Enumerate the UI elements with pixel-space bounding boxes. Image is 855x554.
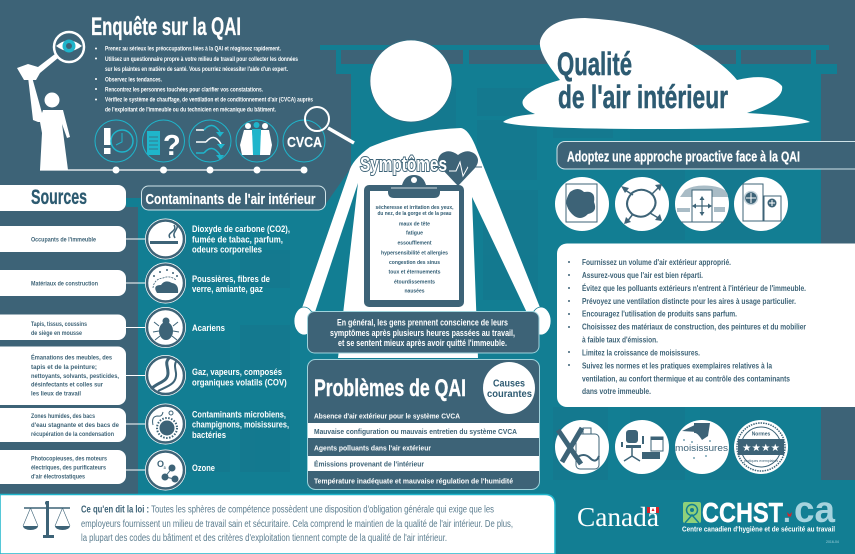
symptoms note: symptômes après plusieurs heures passées au travail,: [330, 328, 515, 338]
source: carpets: Tapis, tissus, coussins: [31, 321, 87, 328]
panel: approche proactive: [555, 142, 855, 474]
causes list: Température inadéquate et mauvaise régulation de l'humidité: [314, 477, 513, 486]
heading: enquête: Enquête sur la QAI: [91, 13, 241, 41]
source: photocopiers: d'air électrostatiques: [31, 474, 85, 480]
icon: ozone: O: [157, 459, 164, 469]
symptoms list: hypersensibilité et allergies: [381, 250, 448, 256]
panel: sources: [0, 185, 141, 484]
source: photocopiers: électriques, des purificateurs: [31, 464, 106, 472]
symptoms list: sécheresse et irritation des yeux,: [376, 205, 454, 211]
recommendations list: Suivez les normes et les pratiques exemplaires relatives à la: [582, 360, 772, 370]
contaminants labels: Ozone: [192, 463, 215, 474]
source: emanations: tapis et de la peinture;: [31, 364, 97, 371]
symptoms list: [376, 205, 454, 295]
icon: mite: [145, 307, 186, 348]
source: humid zones: récupération de la condensation: [31, 431, 114, 438]
contaminants labels: organiques volatils (COV): [192, 377, 287, 388]
heading: contaminants: Contaminants de l'air intérieur: [146, 191, 316, 208]
symptoms title: [360, 151, 482, 186]
investigation bullet list: de l'exploitant de l'immeuble ou du technicien en mécanique du bâtiment.: [105, 106, 276, 113]
logo: CCHST.ca: Centre canadien d'hygiène et de sécurité au travail: [682, 526, 835, 534]
source: emanations: Émanations des meubles, des: [31, 353, 112, 362]
figure with symptoms clipboard: [294, 40, 551, 358]
source: occupants: Occupants de l'immeuble: [31, 236, 96, 244]
source: emanations: [0, 346, 126, 405]
investigation bullet list: Rencontrez les personnes touchées pour clarifier vos constatations.: [105, 86, 263, 93]
icon: ventilation fans: [734, 177, 788, 231]
icon: moisissures: moisissures: [675, 443, 729, 453]
icon: small magnifying glass: [305, 107, 354, 143]
icon: normes: ★★★★: [742, 443, 780, 454]
icon: scales of justice: [23, 501, 70, 538]
symptoms list: nausées: [404, 289, 424, 295]
symptoms list: maux de tête: [399, 221, 430, 227]
source: emanations: désinfectants et colles sur: [31, 382, 103, 389]
icon: CVCA label: CVCA: [287, 134, 322, 151]
source: photocopiers: [0, 450, 126, 484]
icon: normes: pratiques exemplaires: [744, 459, 778, 463]
contaminants labels: Dioxyde de carbone (CO2),: [192, 224, 290, 235]
causes list: Absence d'air extérieur pour le système CVCA: [314, 412, 460, 421]
symptoms note: En général, les gens prennent conscience de leurs: [337, 317, 508, 327]
causes list: Émissions provenant de l'intérieur: [314, 460, 424, 469]
investigation bullet list: sur les plaintes en matière de santé. Vous pourriez nécessiter l'aide d'un expert.: [105, 66, 288, 73]
source: carpets: [0, 314, 126, 340]
symptoms list: toux et éternuements: [388, 269, 440, 275]
source: humid zones: Zones humides, des bacs: [31, 413, 95, 420]
icon: normes: Normes: [752, 432, 771, 438]
source: humid zones: [0, 408, 126, 442]
contaminants labels: verre, amiante, gaz: [192, 284, 263, 295]
panel: contaminants: [126, 186, 326, 490]
law text: Ce qu'en dit la loi : Toutes les sphères de compétence possèdent une disposition d'obligation générale qui exige que les: [81, 504, 494, 516]
source: materials: [0, 270, 126, 296]
title cloud: [503, 18, 810, 129]
recommendations list: ventilation, au confort thermique et au contrôle des contaminants: [582, 373, 790, 383]
icon: cigarette: [145, 218, 186, 260]
icon: air volume: [555, 177, 609, 231]
recommendations list: à faible taux d'émission.: [582, 334, 658, 344]
symptoms title: Symptômes: [360, 154, 447, 176]
icon: dust: [145, 262, 186, 304]
icon: ozone: 3: [164, 465, 166, 470]
contaminants labels: Contaminants microbiens,: [192, 410, 286, 421]
source: carpets: de siège en mousse: [31, 330, 82, 337]
causes list: Mauvaise configuration ou mauvais entretien du système CVCA: [314, 427, 517, 436]
contaminants labels: Poussières, fibres de: [192, 274, 270, 285]
icon: microbes: [145, 404, 186, 444]
law text: employeurs fournissent un milieu de travail sain et sécuritaire. Cela comprend le maintien de la qualité de l'air intérieur. De plus,: [81, 519, 513, 530]
heading: approche proactive: [557, 142, 855, 169]
recommendations list: Limitez la croissance de moisissures.: [582, 347, 700, 357]
panel: ce qu'en dit la loi: [0, 494, 555, 554]
icon: moisissures: [675, 420, 729, 474]
heading: sources: Sources: [31, 186, 87, 209]
contaminants labels: [192, 224, 290, 474]
recommendations list: Encouragez l'utilisation de produits sans parfum.: [582, 309, 737, 319]
investigation bullet list: Utilisez un questionnaire propre à votre milieu de travail pour collecter les données: [105, 56, 298, 63]
contaminants labels: odeurs corporelles: [192, 244, 262, 255]
hands: [294, 307, 551, 335]
icon: inspector with magnifying glass: [17, 32, 84, 170]
timeline with icons: [40, 120, 325, 174]
icon: trend arrows: [196, 125, 225, 160]
title cloud: Qualité: [557, 46, 632, 82]
contaminants labels: fumée de tabac, parfum,: [192, 234, 283, 245]
badge: causes courantes: [483, 362, 535, 414]
icon: chair and paint: [615, 420, 669, 474]
heading: contaminants: [142, 186, 326, 210]
symptoms list: fatigue: [406, 231, 423, 237]
recommendations list: Prévoyez une ventilation distincte pour les aires à usage particulier.: [582, 296, 796, 306]
heading: problèmes: Problèmes de QAI: [314, 375, 466, 402]
logo: CCHST.ca: [682, 489, 839, 544]
causes list: [314, 412, 517, 486]
symptoms note: et se sentent mieux après avoir quitté l'immeuble.: [338, 338, 507, 348]
law text: la plupart des codes du bâtiment et des critères d'exploitation tiennent compte de la qualité de l'air intérieur.: [81, 533, 447, 544]
causes list: Agents polluants dans l'air extérieur: [314, 444, 431, 453]
contaminants labels: champignons, moisissures,: [192, 420, 289, 431]
symptoms list: du nez, de la gorge et de la peau: [378, 211, 452, 217]
icon: document and question: [147, 130, 181, 162]
recommendations list: Fournissez un volume d'air extérieur approprié.: [582, 257, 731, 267]
source: photocopiers: Photocopieuses, des moteurs: [31, 456, 107, 462]
symptoms list: étourdissements: [394, 279, 435, 285]
body: [302, 128, 541, 358]
recommendations list: [557, 244, 855, 407]
icon: document and question: ?: [163, 130, 181, 162]
source: emanations: nettoyants, solvants, pesticides,: [31, 373, 119, 380]
icon: normes: [734, 420, 788, 474]
icon: air distribution: [615, 177, 669, 231]
symptoms list: congestion des sinus: [389, 260, 440, 266]
source: occupants: [0, 226, 126, 252]
icon: no perfume: [555, 420, 609, 474]
investigation bullet list: [95, 46, 313, 113]
logo: CCHST.ca: 2016-04: [826, 540, 839, 544]
icon: gas swirl: [145, 355, 186, 396]
contaminants labels: Acariens: [192, 323, 225, 334]
contaminants labels: bactéries: [192, 430, 226, 441]
title cloud: de l'air intérieur: [558, 79, 728, 115]
logo: CCHST.ca: .: [783, 497, 791, 528]
investigation bullet list: Vérifiez le système de chauffage, de ventilation et de conditionnement d'air (CVCA) auprès: [105, 97, 313, 104]
badge: causes courantes: courantes: [487, 388, 532, 400]
head: [370, 40, 452, 122]
icon: people: [240, 122, 272, 155]
recommendations list: Assurez-vous que l'air est bien réparti.: [582, 270, 703, 280]
panel: problèmes de QAI: [308, 360, 540, 490]
icon: outdoor pollutants: [675, 177, 729, 231]
law text: [81, 504, 513, 544]
source: humid zones: d'eau stagnante et des bacs de: [31, 422, 119, 429]
heading: sources: [0, 185, 126, 211]
contaminants labels: Gaz, vapeurs, composés: [192, 367, 282, 378]
investigation bullet list: Observez les tendances.: [105, 76, 162, 83]
panel: enquête sur la QAI: [17, 13, 354, 174]
logo: CCHST.ca: ca: [794, 489, 835, 530]
logo: CCHST.ca: CCHST: [702, 497, 783, 528]
source: materials: Matériaux de construction: [31, 280, 98, 288]
recommendations list: dans votre immeuble.: [582, 386, 651, 396]
source: emanations: les lieux de travail: [31, 390, 81, 397]
connector: [126, 198, 141, 207]
investigation bullet list: Prenez au sérieux les préoccupations liées à la QAI et réagissez rapidement.: [105, 46, 281, 52]
icon: ozone: [145, 450, 186, 490]
badge: causes courantes: Causes: [493, 378, 525, 390]
symptoms list: essoufflement: [398, 240, 432, 246]
clipboard: [364, 175, 464, 307]
symptoms note: [308, 312, 539, 353]
icon: clock and exclamation: [104, 128, 133, 154]
logo: Canada: Canada: [577, 502, 659, 532]
